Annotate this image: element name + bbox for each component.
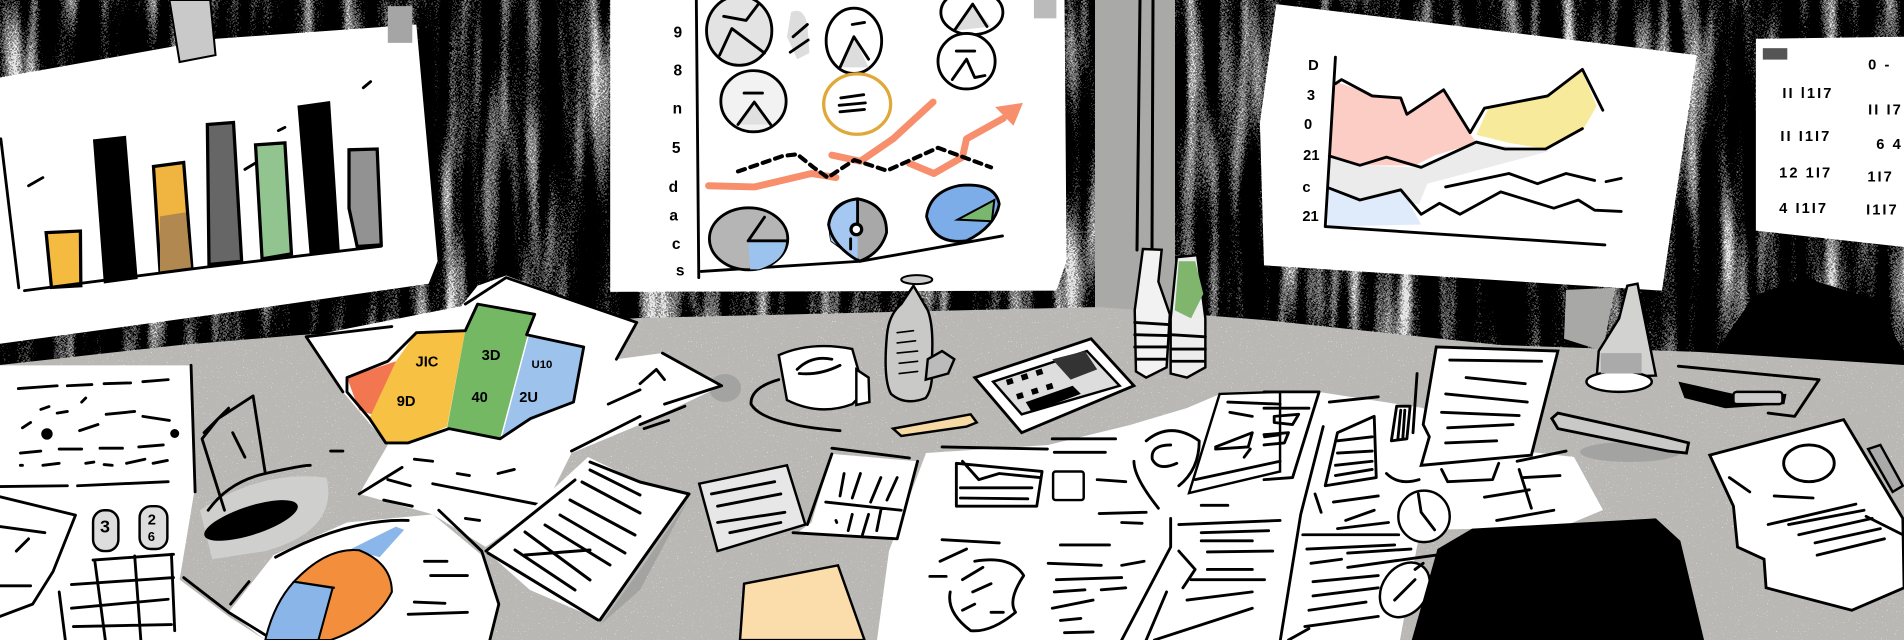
table rows: 12 1I7: [1779, 166, 1832, 182]
axis labels: s: [676, 263, 685, 280]
tape on bar chart poster: [169, 0, 216, 62]
area chart fills: [1327, 71, 1597, 227]
desk items right: [1552, 284, 1904, 610]
foreground chair: [1412, 518, 1704, 640]
poster: area chart: [1260, 4, 1697, 291]
map labels: 9D: [397, 394, 416, 410]
pen set: [1678, 366, 1819, 416]
poster: bar chart: [0, 0, 438, 344]
newspaper spread centre: [930, 392, 1280, 640]
pill tags: 6: [148, 529, 155, 544]
paper stack: [1264, 392, 1378, 640]
poster: pies and trend: [610, 0, 1067, 292]
map labels: U10: [531, 359, 552, 371]
newspaper right block: [1264, 347, 1566, 640]
map labels: 2U: [519, 390, 538, 406]
pie chart plate: [184, 510, 499, 640]
big spread of papers: [877, 392, 1603, 640]
lamp: [200, 396, 310, 549]
axis labels: [669, 25, 685, 280]
axis labels: 5: [672, 140, 681, 157]
axis labels: a: [669, 207, 678, 224]
pin on table poster: [1763, 48, 1787, 60]
map labels: 40: [471, 390, 488, 406]
newspaper round chart: [950, 560, 1024, 631]
pin on bar chart poster: [388, 6, 412, 43]
grey desk shadows: [600, 374, 1680, 625]
clipped note page: [0, 497, 76, 640]
newspaper text lines: [930, 439, 1273, 640]
sub document: [1325, 416, 1376, 486]
long pen: [1552, 413, 1689, 453]
pill tags: 3: [100, 517, 110, 537]
area chart axis labels: 3: [1307, 88, 1315, 104]
map labels: [397, 348, 552, 410]
pill tags: 2: [148, 513, 156, 529]
orange trend arrow: [709, 102, 1023, 187]
small notes: [699, 448, 918, 551]
striped document: [486, 457, 689, 620]
yellow sticky strip: [893, 414, 977, 436]
manila folder: [740, 565, 865, 640]
sheet right with circle: [1710, 420, 1904, 610]
paper with tables: [1189, 392, 1280, 493]
water bottle: [886, 275, 954, 401]
table rows: I1I7: [1866, 202, 1899, 218]
area chart axis labels: 0: [1304, 117, 1312, 133]
map paper: [306, 276, 722, 547]
table top: [0, 307, 1904, 640]
axis labels: n: [673, 100, 682, 117]
table rows: II I7: [1868, 102, 1903, 118]
tablet: [975, 339, 1134, 433]
area chart axis labels: D: [1308, 58, 1319, 74]
bar chart axes: [1, 82, 381, 291]
lamp / grey shadow: [200, 476, 328, 559]
table rows: 4 I1I7: [1779, 201, 1828, 217]
papers left: [0, 365, 310, 640]
left notes scribbles: [0, 365, 195, 492]
area chart axis labels: c: [1302, 180, 1311, 196]
axis labels: 8: [673, 63, 682, 80]
upper pies: [707, 0, 1003, 134]
report sheet: [1421, 347, 1558, 465]
pie wedges: [265, 527, 404, 640]
clock chart: [1398, 491, 1450, 542]
newsprint lines: [1288, 451, 1566, 640]
axis labels: c: [672, 236, 681, 253]
pie notes: [408, 561, 467, 614]
bars: [46, 103, 381, 287]
map labels: 3D: [482, 348, 500, 364]
area chart axis labels: 21: [1303, 148, 1320, 164]
grey window column: [1095, 0, 1175, 310]
pill tags: [93, 506, 167, 551]
background curtain: [0, 0, 1904, 380]
lower pies: [709, 185, 999, 270]
area chart axis labels: 21: [1302, 209, 1319, 225]
table rows: 0 -: [1868, 57, 1891, 73]
table rows: 6 4: [1876, 137, 1903, 153]
pin on pie poster: [1034, 0, 1056, 18]
grid table: [71, 554, 175, 640]
map labels: JIC: [416, 355, 439, 371]
table rows: [1779, 57, 1903, 218]
pie axes: [696, 0, 1002, 278]
newspaper chart: [956, 461, 1084, 506]
fold lines: [1122, 518, 1280, 640]
table rows: 1I7: [1867, 170, 1894, 186]
pens: [1386, 374, 1499, 482]
table rows: II l1I7: [1782, 86, 1833, 102]
glass bottle on saucer: [1564, 284, 1656, 392]
area chart axis labels: [1302, 58, 1320, 225]
table rows: II I1I7: [1780, 129, 1831, 145]
glass bottles: [1135, 249, 1205, 378]
scribbles under map: [331, 451, 514, 520]
axis labels: 9: [673, 25, 682, 42]
round seal C: [1134, 431, 1199, 508]
black dotted trend: [738, 148, 991, 178]
coffee cup and saucer: [751, 346, 869, 431]
area chart lines: [1325, 57, 1621, 245]
map regions: [347, 304, 584, 443]
axis labels: d: [669, 179, 678, 196]
poster: table: [1756, 37, 1904, 247]
paper with pin marker: [640, 353, 722, 429]
chair back (far): [1713, 278, 1904, 367]
